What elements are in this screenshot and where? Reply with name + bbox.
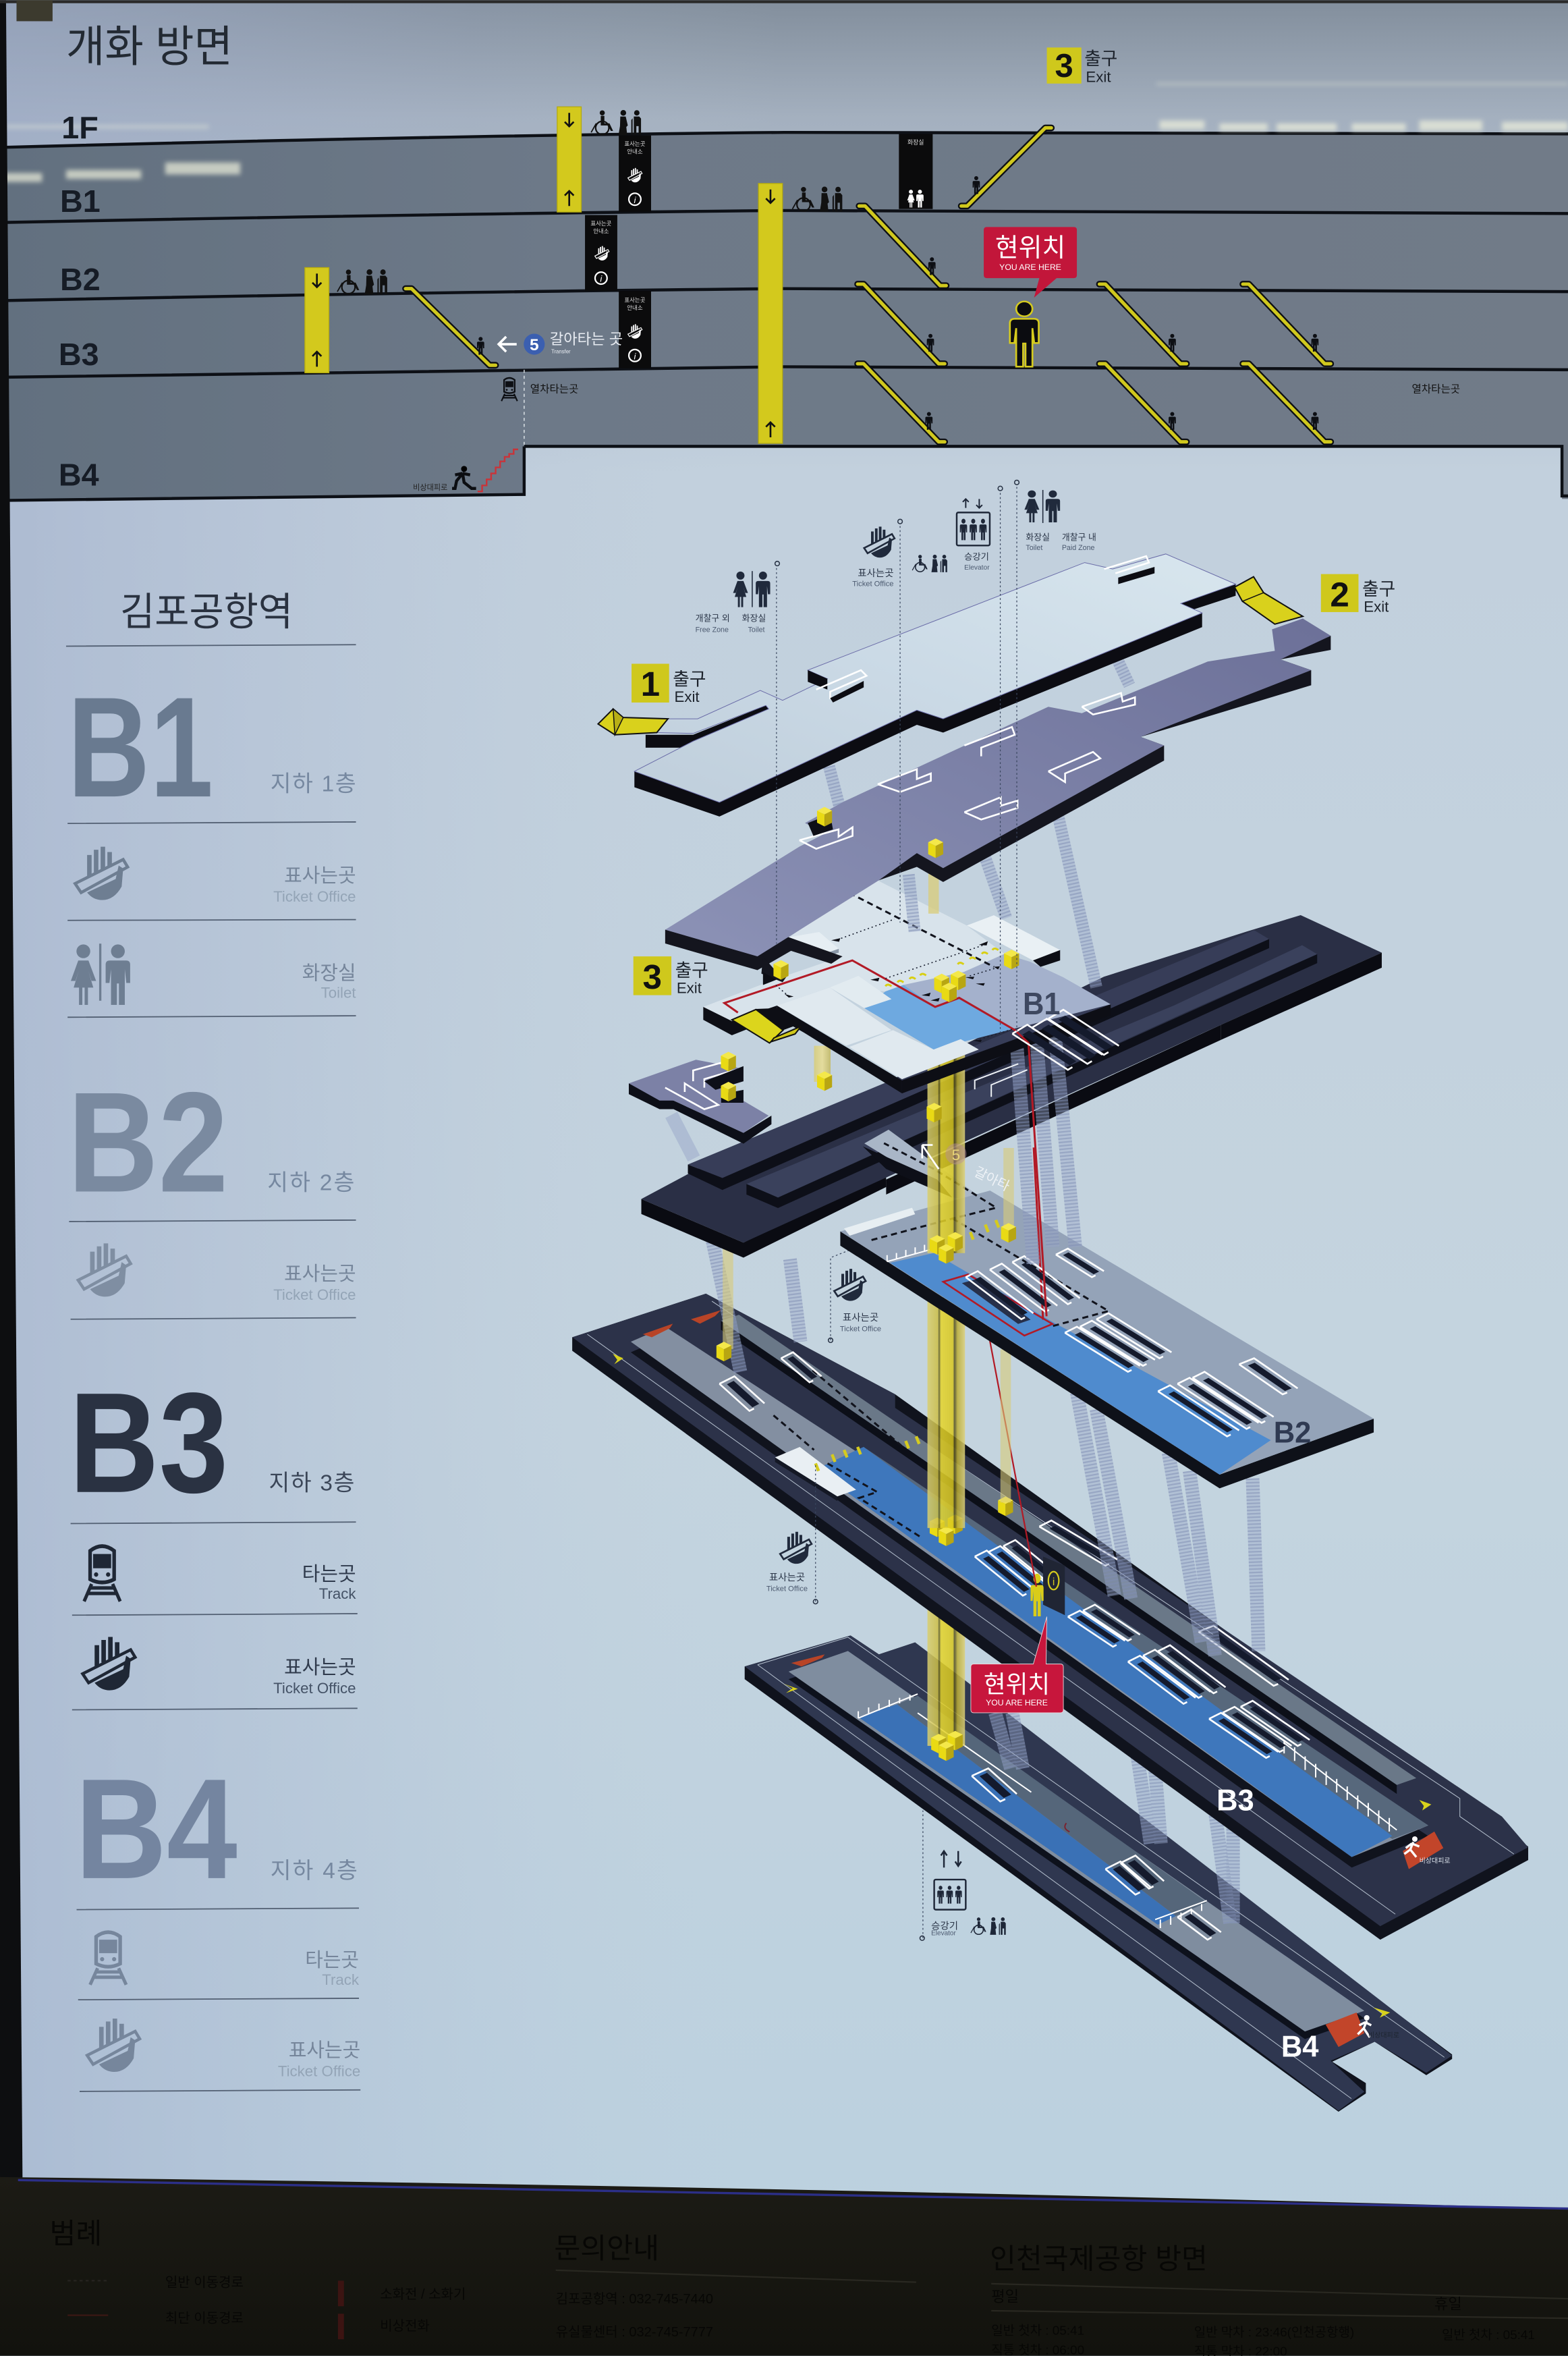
side room slab left [629,1060,771,1144]
exit 1 label: 출구 [673,669,706,689]
floor labels: B1 [60,184,101,219]
transfer sign [499,331,623,355]
panel: B1 legend: 화장실 [302,963,356,985]
legend items dark [67,2274,466,2339]
incheon airport section dark: 일반 막차 : 23:46(인천공항행) [1194,2325,1354,2340]
incheon airport section dark [990,2243,1568,2356]
you are here callout isometric: YOU ARE HERE [986,1698,1048,1707]
floor labels: B4 [59,457,99,492]
elevator cubes B4 [931,1731,963,1761]
you are here callout isometric: 현위치 [984,1671,1050,1698]
elevator callout B1: 승강기 [964,551,989,561]
exit 2 label [1321,574,1395,615]
B3 you are here person [1030,1574,1044,1616]
toilet free zone callout: 화장실 [742,613,766,624]
info box B2 [585,215,617,291]
panel: B3 legend: Track [319,1585,356,1602]
info box B2: 안내소 [593,227,609,234]
train boarding left: 열차타는곳 [530,383,578,395]
info box B1: 표사는곳 [624,140,646,147]
floor plan: B3 slab [572,1294,1528,1940]
ribbons between B1 and B2 [1009,1028,1075,1263]
elevator callout B4: Elevator [931,1929,957,1937]
toilet paid zone callout: Paid Zone [1062,544,1095,552]
ticket office callouts: Ticket Office [840,1325,881,1334]
accessibility icons B2 [337,269,387,294]
ribbons between B3 and B4 [995,1713,1233,1923]
passage transfer mark: 갈아타 [972,1164,1012,1195]
accessibility icons 1F [591,110,641,135]
label B4: B4 [1281,2031,1319,2064]
corridor to B2 [863,1130,995,1208]
you are here person [1010,302,1039,366]
panel: B2 legend: B2 [67,1063,228,1222]
toilet paid zone callout: Toilet [1026,544,1042,552]
gate markers B3 [816,1436,919,1471]
panel: B2 legend: Ticket Office [273,1286,356,1303]
panel: B3 legend: 타는곳 [302,1564,356,1585]
ticket office callout B1 [852,526,895,588]
exit 3 top label: 출구 [1084,49,1117,69]
exit 3 label: 3 [643,958,662,996]
emergency exit section: 비상대피로 [413,483,447,492]
panel: B4 legend: 표사는곳 [289,2040,360,2062]
pale columns to side room [671,1115,694,1159]
passage transfer mark [922,1143,1012,1195]
dashed drop line [524,370,525,446]
B1 central stairs [975,1010,1119,1097]
toilet free zone callout: 개찰구 외 [696,613,730,624]
B3 emergency exit figure [1404,1836,1451,1865]
reflections [0,83,1568,182]
panel: B4 legend [75,1749,360,2080]
B1 upper slab [598,554,1303,817]
exit 2 label: 2 [1330,575,1349,613]
exit 3 top label: 3 [1055,48,1073,84]
elevator callout B4: 승강기 [931,1921,958,1932]
pale columns under B1 [829,660,1129,987]
toilet free zone callout [696,571,771,634]
escalators [405,128,1331,442]
exit 3 top label [1047,47,1117,86]
floor plan: B4 slab [745,1635,1452,2112]
legend items dark: 비상전화 [380,2318,430,2334]
B3 current position info panel: i [1053,1577,1055,1588]
floor labels: B2 [60,262,101,297]
toilet free zone callout: Free Zone [696,626,729,634]
incheon airport section dark: 일반 첫차 : 05:41 [1442,2328,1535,2343]
ticket office callout B1: Ticket Office [852,580,894,588]
info box B3: 안내소 [627,304,643,311]
you are here callout top [984,227,1077,298]
incheon airport section dark: 휴일 [1434,2296,1462,2313]
cross-section floors band [0,132,1568,501]
stairs on B3 [719,1352,1310,1758]
central elevator cube cluster [773,950,1019,1002]
legend title dark: 범례 [49,2218,102,2249]
you are here callout top: YOU ARE HERE [999,263,1061,272]
bottom dark panel [0,2177,1568,2356]
floor labels: B3 [59,337,99,372]
dark transfer passage slab [642,915,1382,1257]
B4 emergency exit figure: 비상대피로 [1368,2031,1399,2039]
info box B3: 표사는곳 [624,297,646,304]
panel: B4 legend: Ticket Office [278,2063,360,2080]
B1 central paid zone slab [703,879,1111,1316]
you are here callout top: 현위치 [995,234,1065,263]
panel: B2 legend: 표사는곳 [284,1263,356,1285]
toilet paid zone callout [1024,490,1096,552]
B1 single elevator cubes [721,807,943,1101]
elevator B1-B4 [758,184,783,443]
incheon airport section dark: 평일 [991,2289,1019,2305]
toilet box: 화장실 [907,139,924,146]
panel: B1 legend: Ticket Office [273,888,356,905]
info box B2: 표사는곳 [590,220,612,227]
elevator callout B1: Elevator [964,564,990,572]
transfer sign: Transfer [551,348,571,354]
floor labels: 1F [61,110,99,145]
info box B2: i [600,274,603,284]
panel: B4 legend: Track [322,1971,360,1988]
ticket office callouts: 표사는곳 [843,1312,878,1323]
elevator callout B1 [912,499,990,572]
pins and dotted leaders [775,480,1019,1037]
panel: B1 legend: Toilet [321,984,356,1001]
info box B1: 안내소 [627,148,643,155]
label B2: B2 [1274,1416,1311,1449]
panel: B2 legend: 지하 2층 [267,1170,354,1195]
column under central slab [814,1046,832,1091]
exit 2 label: 출구 [1362,579,1395,599]
elevator 1F-B1 [557,107,581,212]
legend items dark: 일반 이동경로 [165,2274,244,2290]
toilet box [899,134,932,209]
station name: 김포공항역 [120,591,293,634]
transfer sign: 5 [530,336,539,354]
info box B3 [619,291,651,368]
panel: B4 legend: 타는곳 [305,1950,359,1971]
legend items dark: 소화전 / 소화기 [380,2286,466,2302]
B1 periwinkle slab [665,619,1331,982]
train boarding left [501,378,578,401]
ticket office callouts [829,1241,881,1342]
B3 emergency exit figure: 비상대피로 [1420,1857,1451,1865]
B3 current position info panel [1043,1556,1065,1615]
ticket office callout B3: Ticket Office [766,1585,808,1593]
gap marker triangle [763,972,777,985]
emergency exit section [413,449,518,492]
toilet free zone callout: Toilet [748,626,765,634]
panel: B3 legend: 지하 3층 [269,1471,354,1496]
inquiry section dark: 김포공항역 : 032-745-7440 [556,2291,713,2307]
you are here callout isometric [971,1617,1063,1713]
elevator shaft B1-B2 [928,1052,965,1253]
label B3: B3 [1216,1784,1254,1817]
toilet paid zone callout: 개찰구 내 [1062,532,1096,543]
accessibility icons B1 [792,187,842,212]
exit 3 label [634,956,708,997]
label B1: B1 [1023,986,1061,1021]
stairs on B4 [972,1768,1221,1940]
incheon airport section dark: 일반 첫차 : 05:41 [991,2324,1084,2338]
info box B3: i [634,351,636,361]
elevator shaft B3-B4 [928,1533,965,1746]
inquiry section dark [554,2232,916,2340]
panel: B1 legend: 표사는곳 [284,865,356,887]
inquiry section dark: 유실물센터 : 032-745-7777 [556,2324,713,2340]
panel: B1 legend: B1 [67,667,213,827]
gate markers B2 [951,1220,999,1250]
floor lines [0,132,1568,501]
exit 1 label: 1 [641,665,660,703]
panel: B3 legend: 표사는곳 [284,1657,356,1678]
passage transfer mark: 5 [952,1147,960,1163]
stairs on B2 [965,1249,1297,1436]
exit 3 label: Exit [677,980,702,997]
panel: B4 legend: 지하 4층 [271,1859,358,1884]
red route to B3 [990,1340,1036,1587]
ribbons between B2 and B3 [712,1238,1258,1655]
escalator riders [477,176,1318,430]
exit 1 label [632,664,706,705]
ticket office callout B3: 표사는곳 [769,1572,805,1583]
panel: B1 legend [67,667,356,1005]
exit 1 label: Exit [674,688,700,705]
elevator shaft B2-B3 [928,1250,965,1528]
ticket office callout B1: 표사는곳 [858,568,894,579]
top frame and bracket [0,0,1568,21]
floor plan: B2 slab [840,1143,1374,1488]
incheon airport section dark: 인천국제공항 방면 [990,2243,1208,2275]
exit 2 label: Exit [1364,598,1389,615]
panel: B3 legend [69,1363,356,1697]
ticket office callout B3 [766,1463,818,1604]
panel: B3 legend: Ticket Office [273,1680,356,1697]
transfer sign: 갈아타는 곳 [550,331,623,348]
panel: B2 legend [67,1063,356,1303]
info box B1 [619,136,651,212]
B4 emergency exit figure [1357,2015,1399,2039]
panel: B3 legend: B3 [69,1363,228,1523]
elevator cubes B2 [717,1103,1016,1361]
panel: B4 legend: B4 [75,1749,237,1909]
legend rules [66,645,360,2091]
direction title: 개화 방면 [66,23,233,72]
exit 3 label: 출구 [675,960,708,981]
toilet paid zone callout: 화장실 [1026,532,1050,543]
legend items dark: 최단 이동경로 [165,2311,244,2326]
elevator callout B4 [920,1811,1006,1940]
info box B1: i [634,195,636,205]
inquiry section dark: 문의안내 [554,2232,659,2264]
panel: B1 legend: 지하 1층 [271,771,356,796]
floor labels [59,110,101,492]
elevator B2-B3 [305,268,329,373]
left dark frame [0,0,22,2180]
elevator cubes B3 [930,1496,1013,1546]
train boarding right: 열차타는곳 [1411,383,1460,395]
exit 3 top label: Exit [1086,69,1111,86]
